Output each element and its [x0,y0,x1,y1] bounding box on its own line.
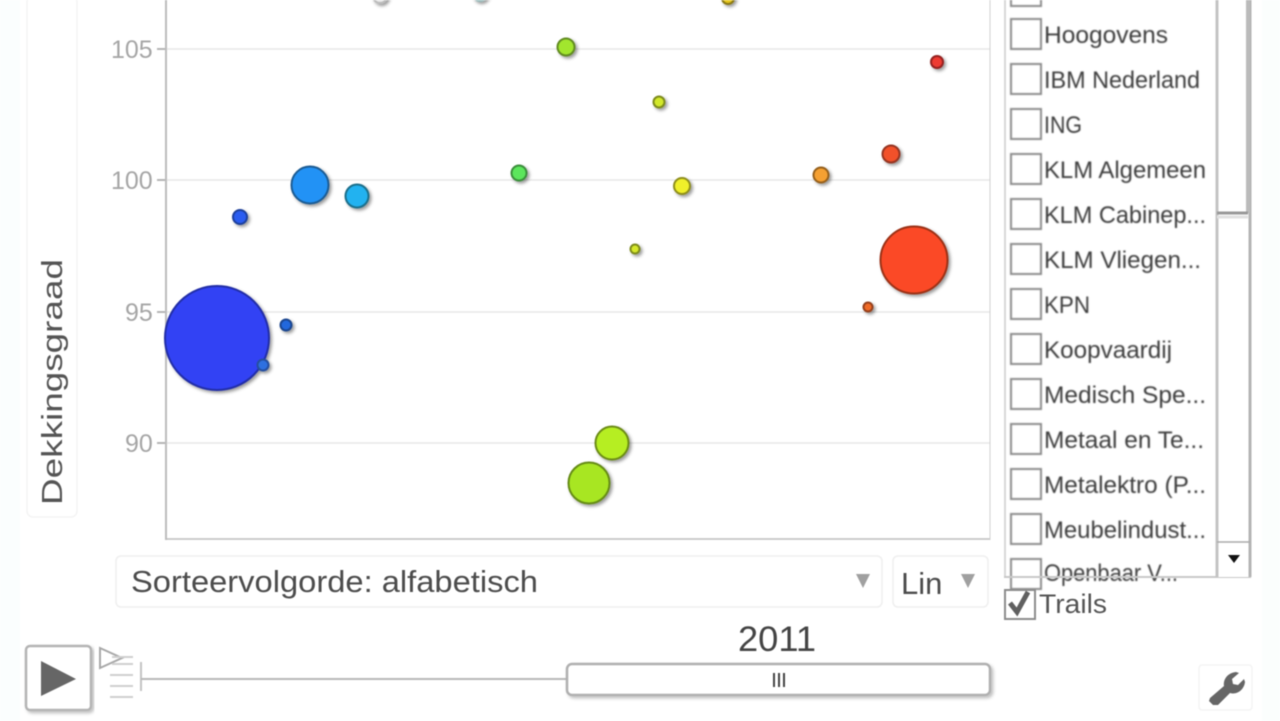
y axis tick labels [111,36,153,458]
entity list [1004,0,1251,589]
scale dropdown [893,556,988,607]
icon: wrench settings [1199,665,1252,710]
y axis tick labels: 100 [111,167,153,195]
list rows: KPN [1044,292,1090,319]
list rows: Koopvaardij [1044,337,1172,364]
list rows: Openbaar V... [1044,560,1178,587]
list rows: Medisch Spe... [1044,382,1206,409]
time slider [141,662,990,695]
trails checkbox: Trails [1039,589,1107,619]
play button [26,646,91,710]
y axis tick labels: 105 [111,36,153,64]
y axis title [27,0,77,517]
list rows: KLM Vliegen... [1044,247,1201,274]
list rows: ING [1044,112,1082,139]
y axis tick labels: 95 [125,299,153,327]
sort order dropdown: Sorteervolgorde: alfabetisch [131,564,538,599]
list rows: Metalektro (P... [1044,472,1206,499]
list scrollbar [1217,0,1250,577]
list rows [1011,19,1206,589]
trails checkbox [1005,589,1107,619]
bubbles [165,0,948,504]
y axis title: Dekkingsgraad [37,259,69,505]
list rows: Meubelindust... [1044,517,1206,544]
sort order dropdown [116,556,882,607]
speed control icon [100,648,133,697]
scale dropdown: Lin [901,566,942,601]
plot area [157,0,990,540]
list rows: Metaal en Te... [1044,427,1204,454]
list rows: Hoogovens [1044,22,1168,49]
list rows: KLM Cabinep... [1044,202,1206,229]
list rows: IBM Nederland [1044,67,1200,94]
year label: 2011 [738,620,816,659]
y axis tick labels: 90 [125,430,153,458]
list rows: KLM Algemeen [1044,157,1206,184]
